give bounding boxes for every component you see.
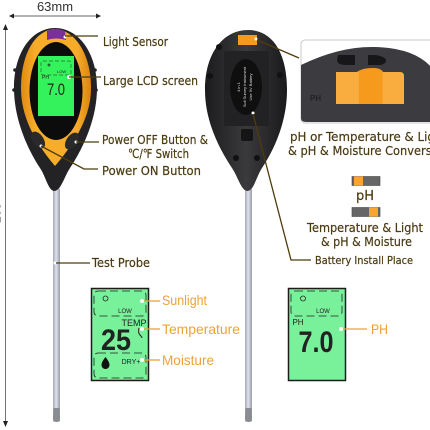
inset: switch close-up bbox=[301, 40, 430, 123]
yellow ring bbox=[21, 29, 91, 166]
LCD screen: 7.0 bbox=[47, 80, 65, 99]
back grips bbox=[207, 44, 283, 161]
label: Light Sensor: Light Sensor bbox=[103, 34, 169, 49]
switch icon: pH bbox=[352, 176, 380, 204]
label: Power OFF Button and switch bbox=[74, 132, 208, 161]
back probe bbox=[245, 188, 252, 422]
back label text: 4 in 1 bbox=[236, 81, 241, 92]
back label text: Soil Survey Instrument bbox=[242, 66, 247, 107]
back body bbox=[205, 30, 287, 191]
label: Large LCD screen: Large LCD screen bbox=[103, 73, 198, 88]
callout: Moisture bbox=[140, 352, 214, 368]
LCD bezel bbox=[30, 42, 82, 140]
callout: Moisture: Moisture bbox=[162, 352, 214, 368]
inset orange slider bbox=[336, 68, 404, 104]
LCD screen: LOW bbox=[57, 69, 66, 74]
LCD panel: temperature display: 25 bbox=[101, 324, 131, 357]
label: Power ON Button: Power ON Button bbox=[102, 163, 201, 178]
label: Power OFF Button and switch: Power OFF Button & bbox=[102, 132, 208, 147]
LCD panel: temperature display: DRY+ bbox=[122, 359, 140, 366]
LCD panel: pH display bbox=[288, 288, 346, 380]
callout: PH bbox=[339, 321, 388, 337]
label: Battery Install Place bbox=[252, 112, 413, 267]
label: Light Sensor bbox=[64, 34, 169, 49]
inset: switch close-up: PH bbox=[310, 94, 321, 103]
LCD panel: pH display: 7.0 bbox=[298, 326, 334, 359]
leader to inset bbox=[254, 38, 299, 58]
callout: PH: PH bbox=[371, 321, 388, 337]
switch icon: pH: pH bbox=[356, 189, 374, 204]
light sensor bbox=[47, 29, 66, 40]
switch icon: temperature: & pH & Moisture bbox=[321, 234, 412, 249]
label: Power ON Button bbox=[40, 144, 201, 178]
body grips bbox=[12, 68, 98, 92]
width dimension: 63mm bbox=[9, 0, 101, 18]
LCD panel: temperature display: TEMP bbox=[121, 318, 147, 328]
callout: Sunlight: Sunlight bbox=[162, 292, 207, 308]
LCD screen: PH bbox=[42, 75, 49, 81]
LCD panel: temperature display: LOW bbox=[118, 309, 132, 315]
back switch bbox=[238, 35, 257, 45]
label: Battery Install Place: Battery Install Place bbox=[315, 254, 413, 267]
LCD panel: pH display: LOW bbox=[316, 309, 330, 315]
test probe bbox=[53, 188, 60, 422]
LCD screen bbox=[38, 56, 74, 116]
height dimension arrow bbox=[0, 24, 8, 427]
back battery cover bbox=[224, 51, 269, 126]
label: Power OFF Button and switch: ℃/℉ Switch bbox=[128, 146, 189, 161]
label: Test Probe bbox=[54, 255, 150, 270]
label: Test Probe: Test Probe bbox=[91, 255, 150, 270]
back label text: Use 9V Battery bbox=[248, 74, 253, 100]
back label text bbox=[236, 66, 253, 107]
back meter bbox=[205, 30, 287, 422]
LCD panel: temperature display bbox=[92, 288, 148, 380]
LCD panel: pH display: PH bbox=[292, 318, 304, 327]
front meter bbox=[12, 28, 98, 422]
callout: Sunlight bbox=[140, 292, 207, 308]
callout: Temperature: Temperature bbox=[162, 321, 240, 337]
heading: conversion caption bbox=[288, 129, 430, 158]
meter body bbox=[14, 28, 97, 191]
label: Large LCD screen bbox=[67, 73, 198, 88]
switch icon: temperature bbox=[306, 208, 423, 249]
buttons bbox=[28, 129, 82, 152]
